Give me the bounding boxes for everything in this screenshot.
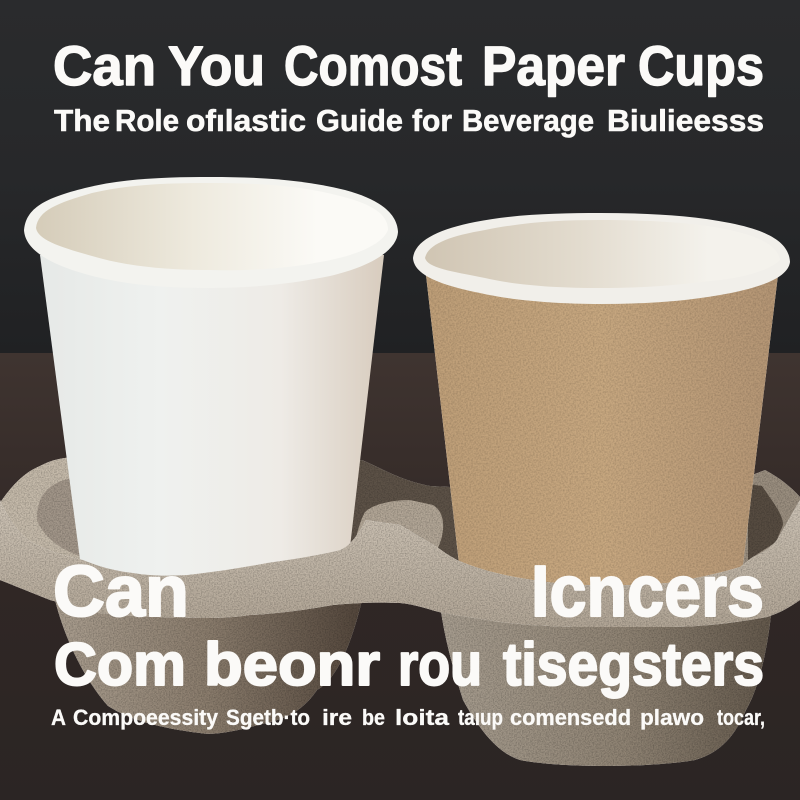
lower heading second line: tisegsters [503,631,764,698]
title: Comost [284,34,462,97]
caption: loita [395,705,450,730]
caption: tocar, [717,705,765,730]
back rim: left [0,457,110,580]
white paper cup [24,177,398,590]
tray pod: left [55,600,362,734]
well interior: left [37,478,95,558]
caption: ire [322,705,352,730]
lower heading left: Can [53,552,189,632]
well interior: right [748,484,783,560]
title: You [168,34,265,97]
subtitle: ofılastic [186,103,306,138]
caption: plawo [640,705,704,730]
caption: be [362,705,385,730]
subtitle: The [54,103,110,138]
title: Cups [638,34,764,97]
title: Paper [482,34,625,97]
cup rim: kraft [413,213,790,304]
cup body: white [40,255,384,590]
caption [51,705,765,730]
tray back: left well and bridge [0,457,800,600]
subtitle [54,103,764,138]
back rim: right of white cup [340,460,470,560]
background wall [0,0,800,353]
cup interior: kraft [425,220,780,288]
subtitle: for [412,103,452,138]
back rim: right [735,470,800,600]
lower heading second line: Com [54,631,186,698]
lower heading second line: beonr [204,631,380,698]
subtitle: Role [115,103,179,138]
lower heading right: Icncers [531,552,764,632]
cup rim: white [24,177,398,288]
centre bridge tab [350,500,460,570]
cup interior: white [36,183,388,270]
tray front rim [0,500,800,627]
lower heading second line [54,631,764,698]
caption: A [51,705,66,730]
lower heading second line: rou [398,631,482,698]
caption: comensedd [510,705,631,730]
caption: Sgetb·to [226,705,310,730]
title [53,34,764,97]
caption: taıup [458,705,503,730]
title: Can [53,34,156,97]
kraft paper cup [413,213,790,590]
subtitle: Guide [316,103,403,138]
cup body: kraft [426,275,778,590]
tray pod: right [440,605,772,766]
caption: Compoeessity [73,705,219,730]
table surface [0,353,800,800]
subtitle: Beverage [462,103,594,138]
subtitle: Biulieesss [607,103,764,138]
